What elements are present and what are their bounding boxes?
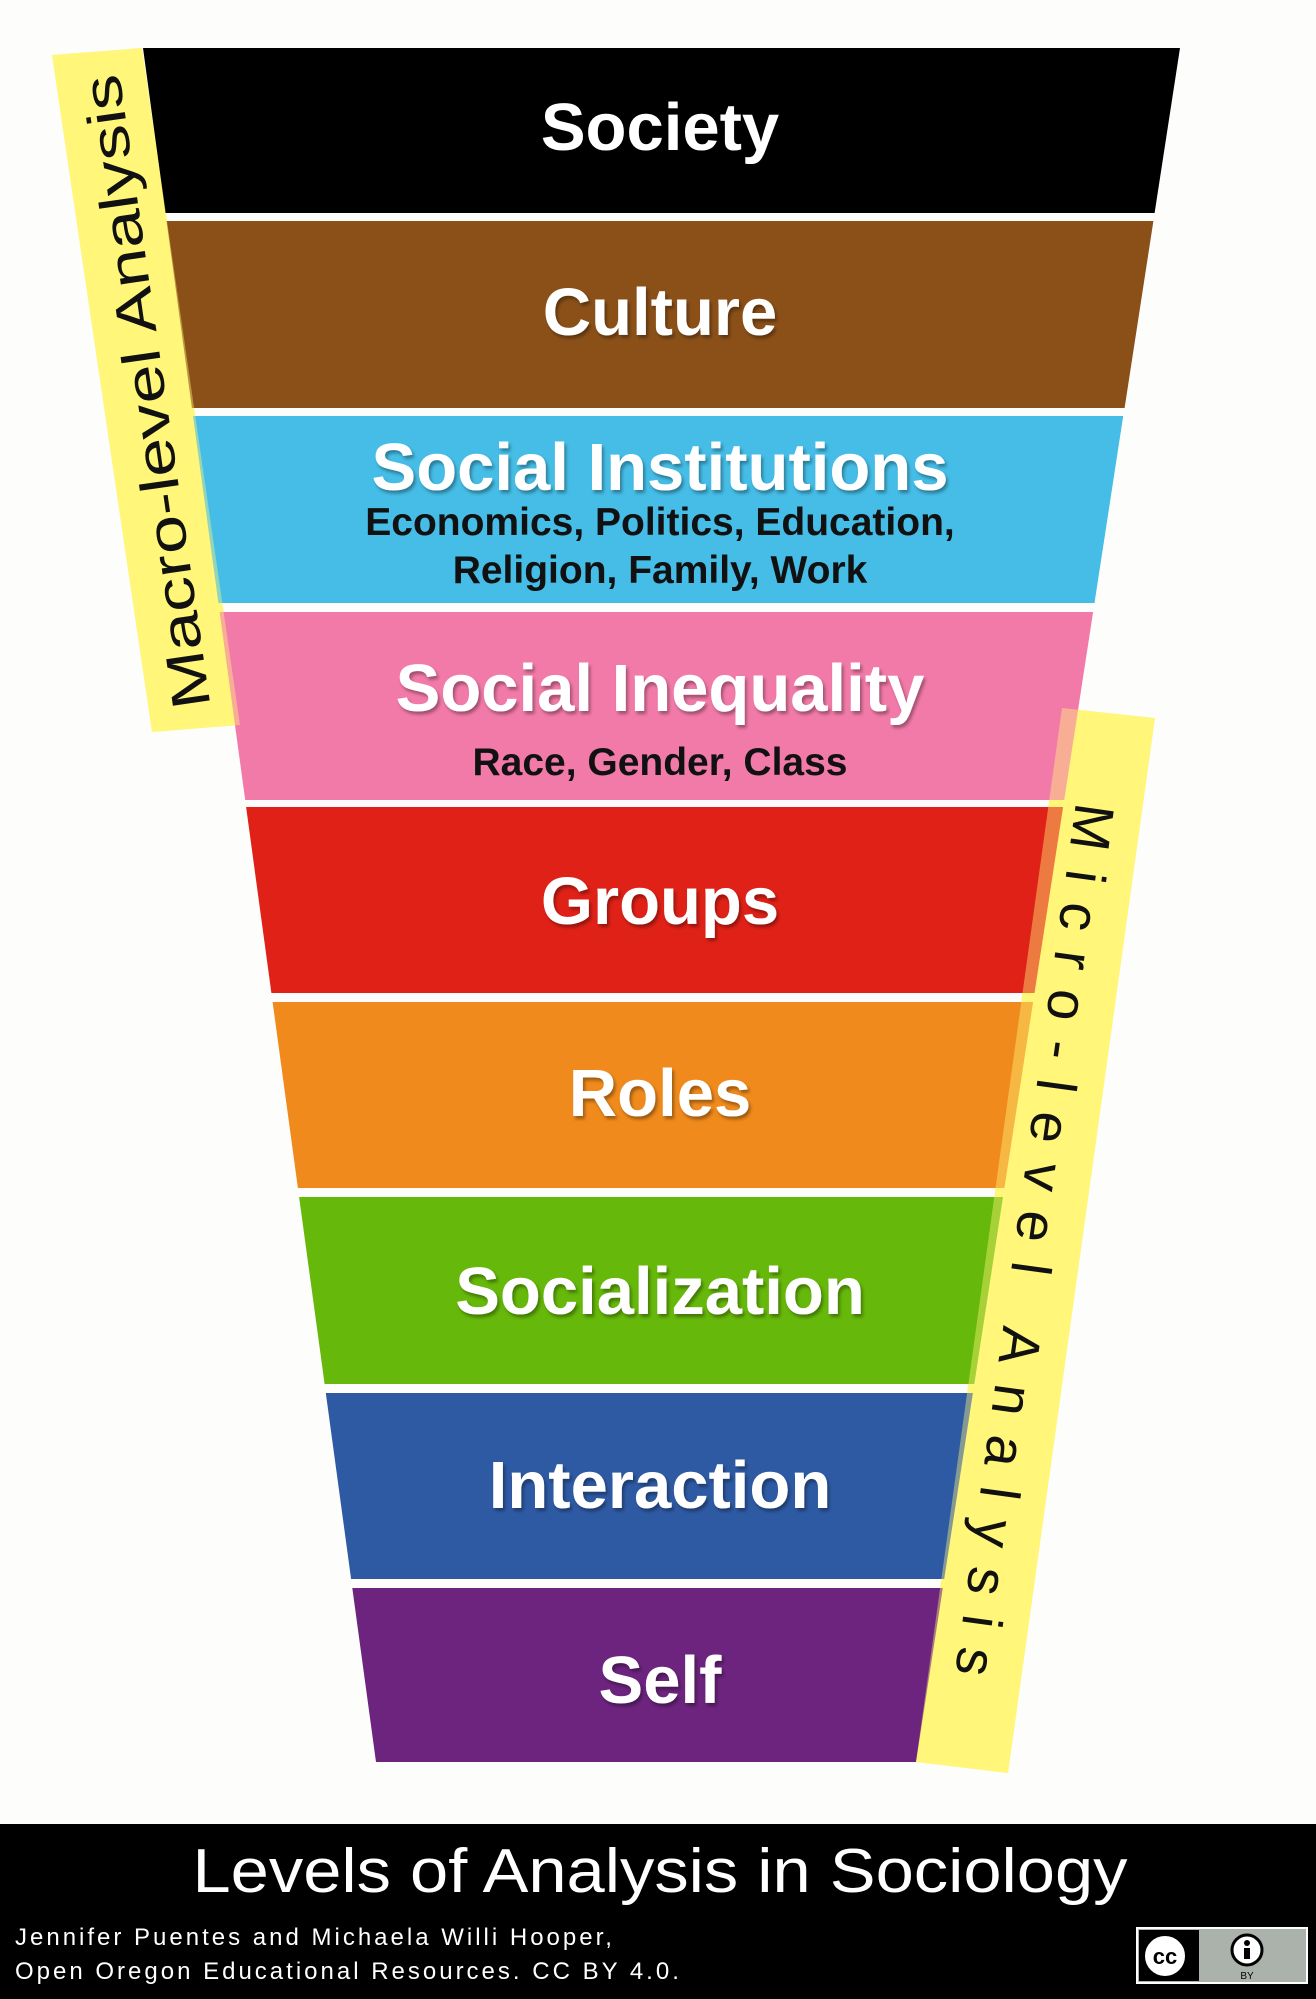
band: Groups: Groups [541, 864, 779, 939]
credits: Jennifer Puentes and Michaela Willi Hooper, [15, 1924, 615, 1951]
icon: CC BY badge [1137, 1928, 1307, 1983]
band: Social Institutions: Economics, Politics, Education, [365, 501, 955, 544]
credits: Open Oregon Educational Resources. CC BY 4.0. [15, 1958, 682, 1985]
micro-level label [916, 708, 1155, 1773]
footer bar [0, 1824, 1316, 1999]
band: Social Inequality: Social Inequality [396, 651, 924, 726]
band: Roles [273, 1002, 1033, 1188]
band: Society: Society [541, 90, 779, 165]
band: Social Inequality [220, 612, 1093, 800]
macro-level label [52, 48, 240, 732]
macro-level label: Macro-level Analysis [72, 71, 222, 713]
micro-level label: Micro-level Analysis [943, 800, 1127, 1680]
band: Roles: Roles [569, 1056, 751, 1131]
band: Society [143, 48, 1180, 213]
icon: CC BY badge: BY [1240, 1971, 1254, 1982]
band: Self [352, 1588, 943, 1762]
band: Interaction: Interaction [489, 1448, 831, 1523]
band: Socialization: Socialization [455, 1254, 865, 1329]
band: Social Institutions [193, 416, 1123, 603]
band: Self: Self [599, 1643, 722, 1718]
band: Social Inequality: Race, Gender, Class [472, 741, 848, 784]
band: Social Institutions: Social Institutions [372, 430, 948, 505]
band: Groups [246, 807, 1063, 993]
macro label background [52, 48, 240, 732]
credits [15, 1924, 682, 1985]
band: Culture [166, 221, 1153, 408]
band: Culture: Culture [543, 275, 777, 350]
band: Interaction [326, 1393, 973, 1579]
footer title: Levels of Analysis in Sociology [192, 1837, 1128, 1906]
band: Social Institutions: Religion, Family, Work [453, 549, 868, 592]
micro label background [916, 708, 1155, 1773]
icon: CC BY badge: cc [1153, 1944, 1177, 1969]
band: Socialization [299, 1197, 1003, 1384]
